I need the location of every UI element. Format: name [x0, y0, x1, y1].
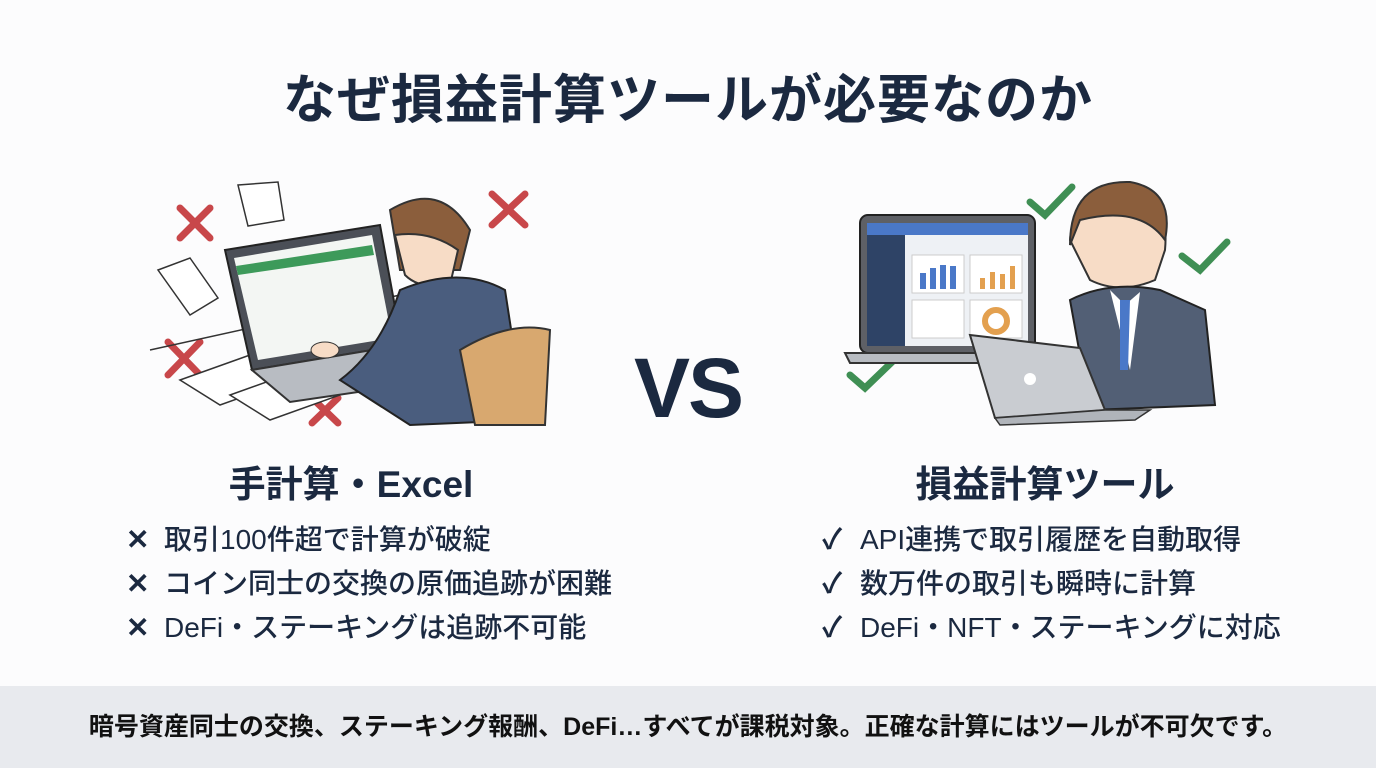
list: tool benefits: ✓ [822, 524, 842, 555]
list: tool benefits: ✓ [822, 568, 842, 599]
list: manual problems: 取引100件超で計算が破綻 [164, 524, 491, 555]
illustration: manual calculation [150, 181, 551, 426]
bottom banner [0, 686, 1376, 768]
illustration: tool [843, 181, 1230, 426]
list: tool benefits [822, 524, 1281, 643]
list: tool benefits: 数万件の取引も瞬時に計算 [860, 568, 1196, 599]
heading: manual: 手計算・Excel [229, 464, 473, 505]
heading: tool: 損益計算ツール [916, 464, 1174, 505]
list: manual problems: ✕ [126, 612, 149, 643]
list: manual problems [126, 524, 612, 643]
title: なぜ損益計算ツールが必要なのか [283, 71, 1093, 130]
list: tool benefits: DeFi・NFT・ステーキングに対応 [860, 612, 1281, 643]
bottom banner: 暗号資産同士の交換、ステーキング報酬、DeFi…すべてが課税対象。正確な計算にはツールが不可欠です。 [89, 713, 1287, 741]
list: manual problems: DeFi・ステーキングは追跡不可能 [164, 612, 586, 643]
list: manual problems: ✕ [126, 568, 149, 599]
list: tool benefits: ✓ [822, 612, 842, 643]
list: manual problems: ✕ [126, 524, 149, 555]
VS label: VS [634, 341, 742, 435]
list: tool benefits: API連携で取引履歴を自動取得 [860, 524, 1241, 555]
list: manual problems: コイン同士の交換の原価追跡が困難 [164, 568, 612, 599]
